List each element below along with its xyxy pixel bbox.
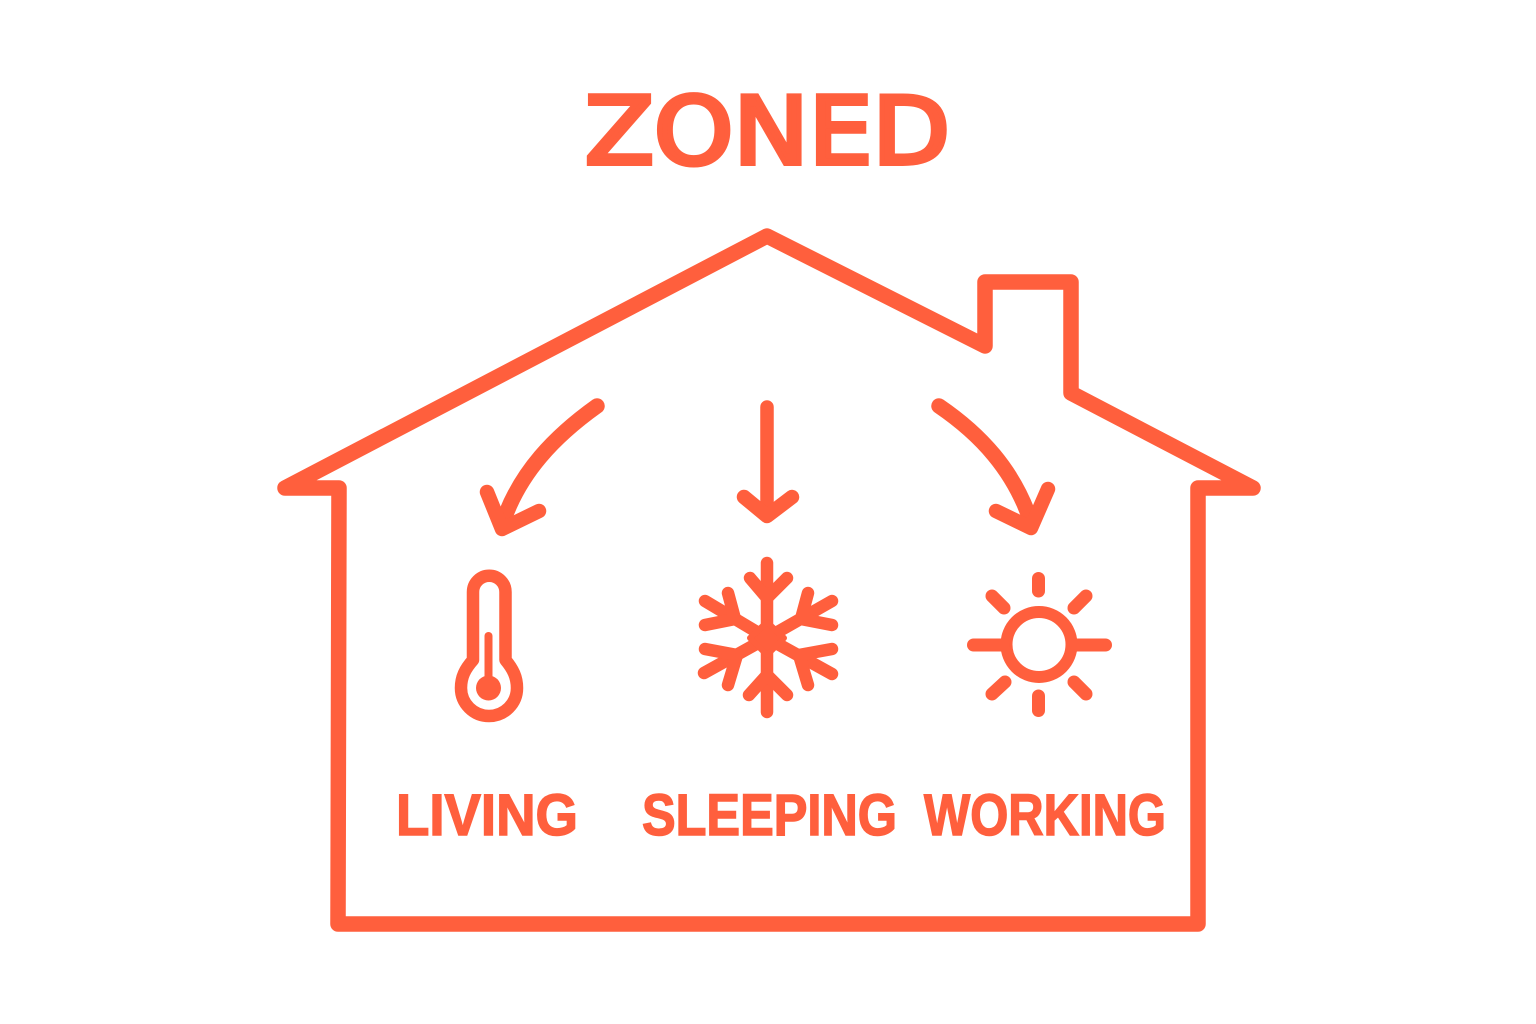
arrow: to sleeping [744,407,792,516]
arrow: to living [487,406,597,529]
arrow: to working [939,406,1048,528]
house outline [285,236,1253,924]
icon: sun [974,578,1106,710]
icon: snowflake [704,563,832,712]
label: living: LIVING [396,783,578,848]
label: working: WORKING [924,783,1166,848]
title: ZONED [585,78,950,186]
label: sleeping: SLEEPING [642,783,897,848]
icon: thermometer [461,576,517,716]
